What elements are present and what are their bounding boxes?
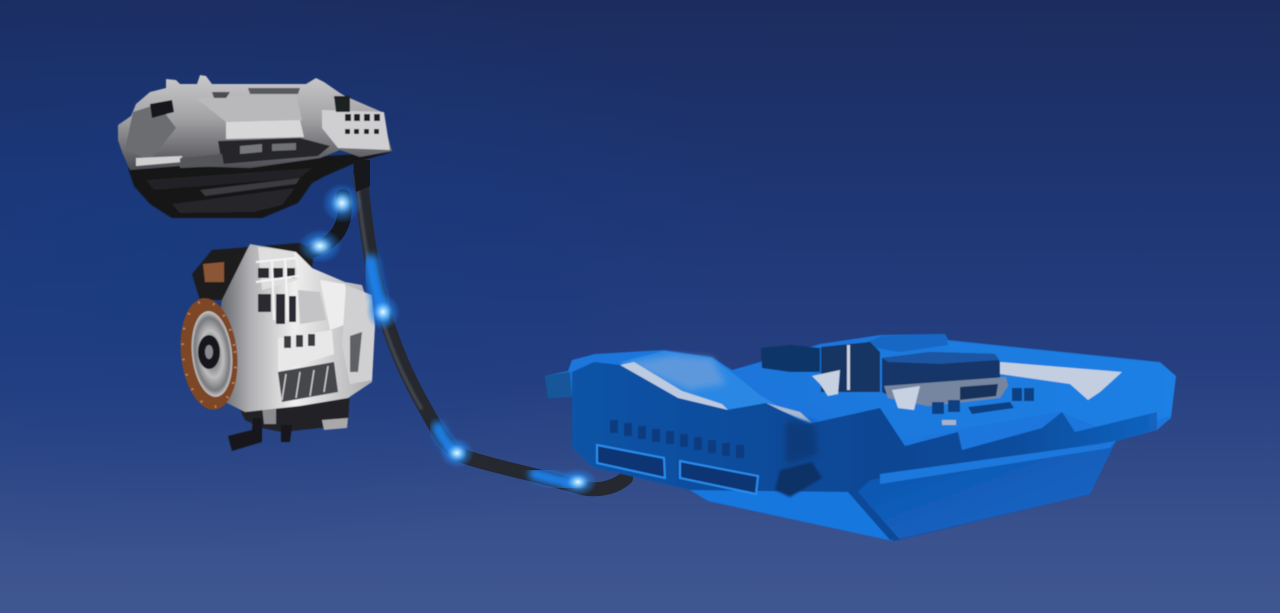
glow: cable bend: [438, 428, 458, 453]
battery: top surface right: [730, 341, 1176, 440]
motor: dark top and rear: [192, 243, 314, 300]
drive cable: long black cable from inverter to battery: [356, 172, 626, 489]
inverter: connector grid: [345, 114, 380, 134]
battery: left vent: [597, 445, 665, 478]
motor: rotor disc with copper ring: [175, 295, 243, 413]
battery: back module lid: [860, 334, 948, 352]
battery: white highlight right: [1000, 362, 1122, 400]
motor unit: [175, 243, 375, 451]
cable connector at inverter: [353, 160, 370, 192]
cable glow spots: [298, 183, 597, 496]
battery: full silhouette: [545, 334, 1176, 541]
battery: right vent: [680, 461, 758, 494]
glow: inverter port: [322, 183, 362, 223]
battery: small dark studs: [932, 388, 1034, 414]
glow: battery end of cable: [535, 474, 575, 484]
battery: hump top light: [620, 351, 808, 424]
motor: silver body: [214, 244, 375, 412]
battery: silver flange: [884, 377, 1008, 406]
battery pack: [545, 334, 1176, 541]
battery: mounting brackets: [812, 345, 920, 410]
inverter: silver upper casing: [118, 75, 392, 170]
glow: motor port: [298, 229, 342, 263]
battery: dark corner shadow: [775, 462, 822, 497]
battery: left tab: [545, 372, 572, 398]
battery: row of cooling slots: [610, 420, 744, 458]
battery: lower right band: [852, 440, 1116, 540]
battery: bright bottom strip: [690, 490, 893, 541]
inverter: dark lower housing: [128, 152, 392, 218]
motor: lower dark frame: [232, 390, 350, 432]
cable: short link from inverter to motor: [314, 196, 345, 250]
glow: long blue section on cable: [371, 262, 384, 315]
battery: center module: [821, 342, 880, 392]
battery: control module small: [761, 345, 820, 372]
battery: dark front face: [572, 362, 1157, 541]
inverter unit: [118, 75, 392, 218]
battery: small grey clip: [942, 420, 956, 425]
battery: main module box: [882, 352, 1000, 396]
